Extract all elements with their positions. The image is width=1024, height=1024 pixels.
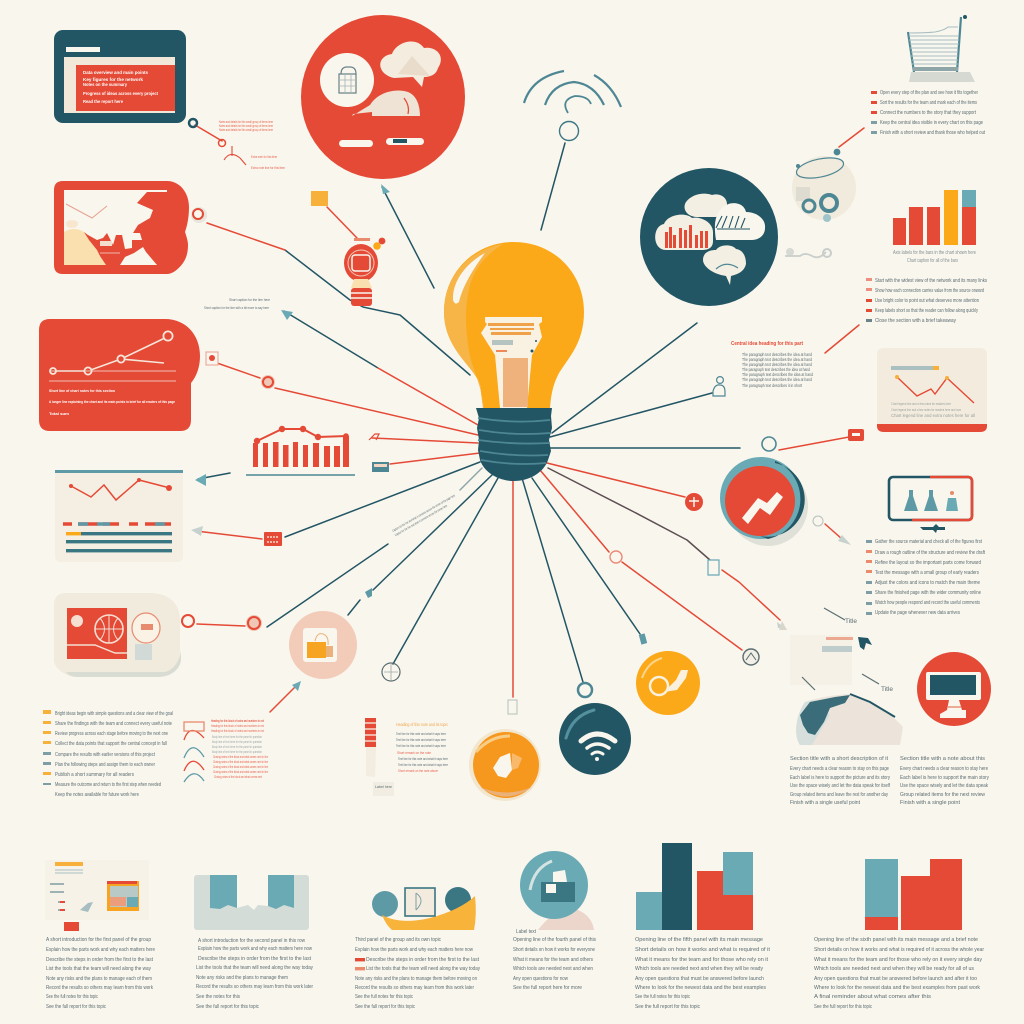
chart block: arches and red text — [184, 719, 268, 782]
text list: right lower: Gather the source material and check all of the figures first — [875, 539, 982, 545]
text columns: middle right: Every chart needs a clear reason to stay here — [900, 766, 988, 772]
text column: bottom 6: Which tools are needed next and when they will be ready for all of us — [814, 966, 975, 972]
text column: bottom 3 — [355, 937, 480, 1010]
text columns: middle right: Every chart needs a clear reason to stay on this page — [790, 766, 889, 772]
text columns: middle right: Each label is here to support the main story — [900, 775, 989, 781]
text along connector: Caption for the line and what it connects across the center here — [394, 504, 448, 537]
chart block: arches and red text: Heading for this block of notes and numbers in red — [211, 729, 264, 733]
icon: globe node on map panel — [191, 207, 207, 223]
text list: left bullets: Bright ideas begin with simple questions and a clear view of the goal — [55, 711, 173, 717]
text list: right middle — [866, 278, 987, 324]
text list: right lower: Refine the layout so the important parts come forward — [875, 560, 981, 566]
text columns: middle right: Use the space wisely and let the data speak for itself — [790, 783, 891, 789]
text list: left bullets: Keep the notes available for future work here — [55, 792, 139, 798]
text column: bottom 2: See the full report for this topic — [196, 1004, 259, 1010]
panel: line chart card right: Chart legend line and a few notes for readers here and now — [891, 408, 961, 412]
icon: person on connector — [713, 377, 725, 396]
text block: red bar and notes: Heading of this note and its topic — [396, 722, 449, 727]
text block: red bar and notes: Short remark on the note — [397, 751, 431, 755]
icon circle: orange key — [636, 651, 700, 715]
icon circle: teal globe with box — [520, 851, 594, 930]
text column: bottom 4: See the full report here for more — [513, 985, 582, 991]
icon: small wave connector — [785, 248, 831, 257]
panel: bottom orange landscape — [372, 887, 476, 930]
text column: bottom 5: Any open questions that must be answered before launch — [635, 976, 764, 982]
text column: bottom 4: Opening line of the fourth panel of this — [513, 937, 596, 943]
arrowheads — [191, 184, 851, 691]
text column: bottom 1: List the tools that the team will need along the way — [46, 966, 151, 972]
text column: bottom 5 — [635, 937, 771, 1010]
text list: right middle: Use bright color to point out what deserves more attention — [875, 298, 979, 304]
text column: bottom 6: Short details on how it works and what is required of it across the whole year — [814, 947, 984, 953]
pointer labels and pale map: Title — [845, 619, 858, 625]
small note: top left connector: Notes and details for this small group of items here — [219, 124, 273, 128]
bar chart: bottom right — [865, 859, 962, 930]
icon: red label on connector — [264, 532, 282, 546]
text column: bottom 4: Which tools are needed next and when — [513, 966, 593, 972]
text column: bottom 1: Record the results so others may learn from this work — [46, 985, 153, 991]
text list: right top: Finish with a short review and thank those who helped out — [880, 130, 985, 136]
text column: bottom 3: Record the results so others may learn from this work later — [355, 985, 474, 991]
text column: bottom 4: Label text — [516, 929, 537, 935]
text column: bottom 4: Short details on how it works for everyone — [513, 947, 595, 953]
text block: heading with paragraph: The paragraph text describes the idea at hand — [742, 367, 811, 372]
icon: note on vertical line — [508, 700, 517, 714]
text block: red bar and notes: Label here — [375, 785, 392, 789]
icons: globe nodes on connector — [182, 615, 262, 631]
small note: top left connector — [189, 119, 285, 170]
chart block: arches and red text: Closing notes of the block and what comes next in line — [213, 755, 268, 759]
text list: left bullets: Compare the results with earlier versions of this project — [55, 752, 155, 758]
text list: right lower: Adjust the colors and icons to match the main theme — [875, 580, 980, 586]
chart block: arches and red text: Heading for this block of notes and numbers in red — [211, 724, 264, 728]
text column: bottom 6: What it means for the team and for those who rely on it every single day — [814, 957, 983, 963]
panel: dark browser window: Read the report here — [83, 99, 123, 104]
text list: right lower: Draw a rough outline of the structure and review the draft — [875, 550, 986, 556]
text block: heading with paragraph: The paragraph text describes the idea at hand — [742, 352, 813, 357]
bar chart: bottom center — [636, 843, 753, 930]
text block: red bar and notes: Short remark on the note above — [398, 769, 438, 773]
chart block: arches and red text: Body line of text here for the panel in question — [212, 750, 262, 754]
text column: bottom 4: What it means for the team and others — [513, 957, 593, 963]
icon circle: wifi — [559, 703, 631, 775]
text list: right middle: Close the section with a brief takeaway — [875, 318, 956, 324]
chart block: arches and red text: Body line of text here for the panel in question — [212, 740, 262, 744]
text column: bottom 2: See the notes for this — [196, 994, 240, 1000]
icon: small tool node — [365, 588, 372, 598]
text columns: middle right — [790, 756, 989, 806]
text column: bottom 3: List the tools that the team will need along the way today — [366, 966, 480, 972]
icon circle: dark circle with clouds — [640, 168, 778, 306]
text list: left bullets: Measure the outcome and return to the first step when needed — [55, 782, 161, 788]
text column: bottom 3: Describe the steps in order from the first to the last — [366, 957, 480, 963]
text column: bottom 2: List the tools that the team will need along the way today — [196, 965, 313, 971]
text along connector: Caption for the line and what it connects across the center of the page here — [392, 493, 456, 533]
floating label: Short caption for the line with a bit more to say here — [204, 306, 269, 310]
icon: mountain shape — [796, 694, 903, 745]
text column: bottom 2: Explain how the parts work and why each matters here now — [198, 946, 312, 952]
text list: left bullets: Share the findings with the team and connect every useful note — [55, 721, 172, 727]
text column: bottom 6: A final reminder about what comes after this — [814, 994, 932, 1000]
text column: bottom 3: Explain how the parts work and why each matters here now — [355, 947, 473, 953]
text column: bottom 1: See the full notes for this topic — [46, 994, 98, 1000]
icon: peach circle with folder — [289, 611, 357, 679]
connector lines radiating from bulb — [195, 125, 864, 712]
text list: right top: Keep the central idea visible in every chart on this page — [880, 120, 983, 126]
panel: bottom dashboard illustration — [45, 860, 149, 931]
chart block: arches and red text: Closing notes of the block and what comes next in line — [213, 770, 268, 774]
bar chart: red bars with trend line — [246, 426, 355, 475]
text column: bottom 5: Short details on how it works and what is required of it — [635, 947, 771, 953]
text list: right lower: Update the page whenever new data arrives — [875, 610, 960, 616]
panel: line chart card right: Chart legend line and a few notes for readers here — [891, 402, 951, 406]
text list: right lower: Share the finished page with the wider community online — [875, 590, 981, 596]
text column: bottom 1: Note any risks and the plans to manage each of them — [46, 976, 152, 982]
panel: dark browser window — [54, 30, 186, 123]
text block: heading with paragraph: Central idea heading for this part — [731, 341, 803, 347]
chart block: arches and red text: Heading for this block of notes and numbers in red — [211, 719, 264, 723]
text columns: middle right: Section title with a short description of it — [790, 756, 888, 762]
text column: bottom 6 — [814, 937, 984, 1010]
icon: basket bar graphic — [908, 15, 975, 82]
icon: pale globe with tools — [792, 149, 856, 222]
text list: right top: Connect the numbers to the story that they support — [880, 110, 977, 116]
floating label — [204, 298, 270, 310]
panel: red map panel — [54, 181, 189, 274]
text column: bottom 6: Any open questions that must be answered before launch and after it too — [814, 976, 977, 982]
text column: bottom 2: A short introduction for the second panel in this row — [198, 938, 305, 944]
text column: bottom 3: Note any risks and the plans to manage them before moving on — [355, 976, 477, 982]
text columns: middle right: Group related items for the next review — [900, 792, 985, 798]
text block: red bar and notes — [365, 718, 449, 796]
text list: right middle: Keep labels short so that the reader can follow along quickly — [875, 308, 978, 314]
chart block: arches and red text: Closing notes of the block and what comes next in line — [213, 765, 268, 769]
text block: heading with paragraph: The paragraph text describes the idea at hand — [742, 377, 813, 382]
central light bulb — [444, 242, 584, 481]
chart block: arches and red text: Closing notes of the block and what comes next — [214, 775, 263, 779]
text column: bottom 4: Any open questions for now — [513, 976, 568, 982]
text column: bottom 6: Opening line of the sixth panel with its main message and a brief note — [814, 937, 978, 943]
icon: orange tag — [311, 191, 328, 206]
text block: red bar and notes: Text line for this note and what it says here — [398, 757, 448, 761]
text columns: middle right: Section title with a note about this — [900, 756, 985, 762]
panel: red line chart: Short line of chart notes for this section — [49, 389, 116, 393]
floating label: Short caption for the line here — [229, 298, 270, 302]
panel: red line chart: A longer line explaining the chart and its main points in brief for all readers of this page — [49, 400, 175, 404]
text block: heading with paragraph: The paragraph text describes the idea at hand — [742, 372, 814, 377]
text list: right middle: Show how each connection carries value from the source onward — [875, 288, 984, 294]
text list: left bullets: Plan the following steps and assign them to each owner — [55, 762, 155, 768]
panel: red and teal outlined chart — [889, 477, 972, 520]
panel: line chart card right — [877, 348, 987, 432]
text block: heading with paragraph: The paragraph text describes the idea at hand — [742, 357, 813, 362]
text block: heading with paragraph: The paragraph text describes the idea at hand — [742, 362, 813, 367]
text along connector — [392, 493, 458, 537]
small note: top left connector: Extra note line for this item — [251, 166, 285, 170]
text column: bottom 1 — [46, 937, 155, 1010]
bulb highlight — [453, 253, 485, 304]
panel: line chart card — [55, 470, 183, 562]
small note: top left connector: Notes and details for this small group of items here — [219, 128, 273, 132]
text column: bottom 1: See the full report for this topic — [46, 1004, 106, 1010]
text column: bottom 2: Describe the steps in order from the first to the last — [198, 956, 312, 962]
panel: dark browser window: Data overview and main points — [83, 70, 148, 75]
text column: bottom 5: See the full notes for this topic — [635, 994, 690, 1000]
filament — [481, 317, 542, 408]
text list: left bullets — [43, 710, 173, 798]
bar chart: right top — [893, 190, 976, 264]
icon circle: red monitor — [917, 652, 991, 726]
small note: top left connector: Extra note for this item — [251, 155, 277, 159]
icon: wifi arcs with ring — [524, 71, 621, 140]
text column: bottom 3: See the full notes for this topic — [355, 994, 413, 1000]
text column: bottom 2 — [196, 938, 313, 1010]
chart block: arches and red text: Body line of text here for the panel in question — [212, 735, 262, 739]
text block: red bar and notes: Text line for this note and what it says here — [398, 763, 448, 767]
panel: dark browser window: Notes on the summary — [83, 82, 127, 87]
text list: left bullets: Collect the data points that support the central concept in full — [55, 741, 167, 747]
text list: right lower: Watch how people respond and record the useful comments — [875, 600, 980, 606]
text block: heading with paragraph — [731, 341, 814, 388]
icon: small ring by badge — [813, 516, 823, 526]
text column: bottom 3: Third panel of the group and its own topic — [355, 937, 441, 943]
panel: red line chart: Total sum — [49, 412, 70, 416]
text column: bottom 4 — [513, 929, 596, 991]
text list: left bullets: Review progress across each stage before moving to the next one — [55, 731, 168, 737]
panel: bottom teal blocks on grey — [194, 875, 309, 930]
text column: bottom 3: See the full report for this topic — [355, 1004, 415, 1010]
icon: small red light bulb — [344, 238, 385, 306]
text list: left bullets: Publish a short summary for all readers — [55, 772, 134, 778]
text column: bottom 1: Explain how the parts work and why each matters here — [46, 947, 155, 953]
text block: red bar and notes: Text line for this note and what it says here — [396, 732, 446, 736]
text list: right top — [871, 90, 985, 136]
chart block: arches and red text: Body line of text here for the panel in question — [212, 745, 262, 749]
icons: small labels by bar chart — [369, 434, 389, 472]
text list: right top: Sort the results for the team and mark each of the items — [880, 100, 977, 106]
text column: bottom 1: Describe the steps in order from the first to the last — [46, 957, 154, 963]
text column: bottom 5: Which tools are needed next and when they will be ready — [635, 966, 764, 972]
text column: bottom 6: Where to look for the newest data and the best examples from past work — [814, 985, 981, 991]
panel: dark browser window: Progress of ideas across every project — [83, 91, 158, 96]
icon circle: red arrow badge — [720, 457, 808, 546]
bar chart: right top: Chart caption for all of the bars — [907, 258, 958, 264]
icon: small dark pointer — [920, 524, 945, 533]
text columns: middle right: Each label is here to support the picture and its story — [790, 775, 890, 781]
panel: line chart card right: Chart legend line and extra notes here for all — [891, 413, 975, 418]
text columns: middle right: Use the space wisely and let the data speak — [900, 783, 988, 789]
text block: red bar and notes: Text line for this note and what it says here — [396, 744, 446, 748]
text columns: middle right: Finish with a single useful point — [790, 800, 861, 806]
pointer labels and pale map: Title — [881, 687, 894, 693]
panel: dark browser window: Key figures for the network — [83, 77, 144, 82]
text list: right middle: Start with the widest view of the network and its many links — [875, 278, 987, 284]
text column: bottom 1: A short introduction for the first panel of the group — [46, 937, 151, 943]
text column: bottom 5: Where to look for the newest data and the best examples — [635, 985, 767, 991]
text column: bottom 5: What it means for the team and for those who rely on it — [635, 957, 769, 963]
screw base — [476, 408, 552, 481]
icon: small globe above wifi — [578, 683, 592, 697]
panel: globe card — [54, 593, 181, 677]
bar chart: right top: Axis labels for the bars in the chart shown here — [893, 250, 976, 256]
chart block: arches and red text: Closing notes of the block and what comes next in line — [213, 760, 268, 764]
text column: bottom 2: Note any risks and the plans to manage them — [196, 975, 288, 981]
pointer labels and pale map — [790, 608, 894, 693]
icon: clock node and red tag — [762, 429, 864, 451]
text list: right top: Open every step of the plan and see how it fits together — [880, 90, 978, 96]
icons: chart connector nodes — [206, 352, 275, 389]
icons: small connector nodes lower right — [610, 493, 787, 665]
text block: red bar and notes: Text line for this note and what it says here — [396, 738, 446, 742]
text list: right lower — [866, 539, 986, 616]
text columns: middle right: Group related items and leave the rest for another day — [790, 792, 888, 798]
small note: top left connector: Notes and details for this small group of items here — [219, 120, 273, 124]
text column: bottom 6: See the full report for this topic — [814, 1004, 872, 1010]
text column: bottom 2: Record the results so others may learn from this work later — [196, 984, 313, 990]
text columns: middle right: Finish with a single point — [900, 800, 961, 806]
text column: bottom 5: See the full report for this topic — [635, 1004, 700, 1010]
text column: bottom 5: Opening line of the fifth panel with its main message — [635, 937, 763, 943]
icon circle: red circle with clouds — [301, 15, 465, 179]
icon: small globe node — [382, 663, 400, 681]
text block: heading with paragraph: The paragraph text describes it in short — [742, 383, 803, 388]
icon circle: orange globe — [469, 729, 541, 801]
panel: red line chart — [39, 319, 200, 431]
text list: right lower: Test the message with a small group of early readers — [875, 570, 979, 576]
